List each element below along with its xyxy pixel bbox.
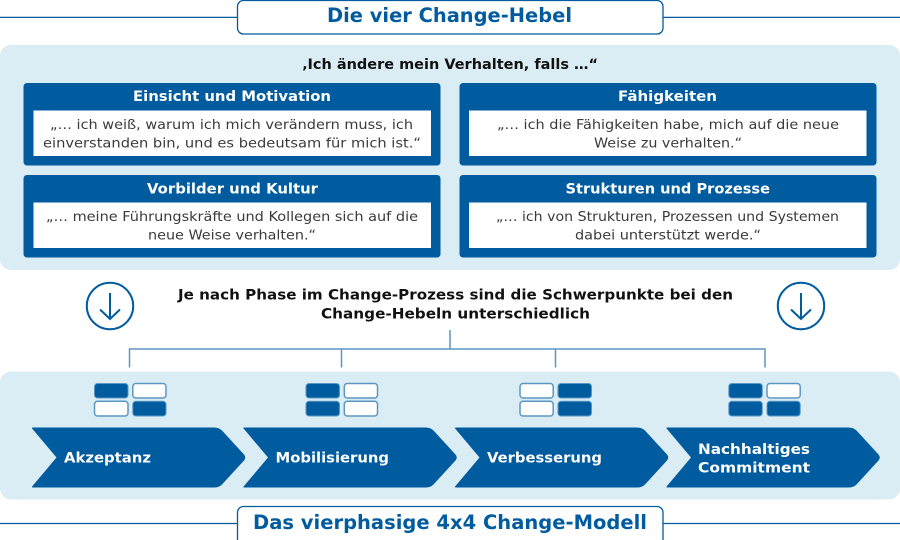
bottom title banner: Das vierphasige 4x4 Change-Modell [253, 511, 647, 534]
card: Einsicht und Motivation: einverstanden bin, und es bedeutsam für mich ist.“ [43, 136, 421, 152]
icon: matrix Mobilisierung [306, 384, 378, 416]
middle statement: Je nach Phase im Change-Prozess sind die Schwerpunkte bei den [177, 288, 733, 304]
card: Einsicht und Motivation: Einsicht und Motivation [133, 89, 331, 105]
arrow: Akzeptanz [32, 428, 245, 488]
panel heading: ‚Ich ändere mein Verhalten, falls …“ [302, 57, 598, 73]
bottom title banner [0, 506, 900, 540]
card: Fähigkeiten [460, 83, 876, 166]
card: Fähigkeiten: „… ich die Fähigkeiten habe, mich auf die neue [497, 117, 839, 133]
panel: die vier Change-Hebel [0, 45, 900, 270]
card: Strukturen und Prozesse: dabei unterstützt werde.“ [575, 228, 761, 244]
middle statement [177, 288, 733, 322]
icon: matrix Nachhaltiges Commitment [729, 384, 800, 416]
card: Fähigkeiten: Fähigkeiten [618, 89, 717, 105]
card: Vorbilder und Kultur: „… meine Führungskräfte und Kollegen sich auf die [46, 209, 418, 225]
middle statement: Change-Hebeln unterschiedlich [321, 306, 590, 322]
panel: vierphasiges Modell [0, 372, 900, 500]
icon: left down arrow [87, 283, 133, 329]
icon: matrix Akzeptanz [94, 384, 166, 416]
connector bracket [130, 330, 765, 368]
card: Fähigkeiten: Weise zu verhalten.“ [594, 136, 742, 152]
arrow: Nachhaltiges Commitment: Nachhaltiges [698, 442, 810, 458]
card: Vorbilder und Kultur [24, 175, 440, 258]
arrow: Nachhaltiges Commitment [666, 428, 880, 488]
card: Strukturen und Prozesse: Strukturen und Prozesse [566, 182, 770, 198]
arrow: Mobilisierung [243, 428, 457, 488]
top title banner [0, 0, 900, 34]
card: Strukturen und Prozesse: „… ich von Strukturen, Prozessen und Systemen [496, 209, 839, 225]
arrow: Verbesserung: Verbesserung [487, 450, 602, 466]
card: Einsicht und Motivation [24, 83, 440, 166]
card: Strukturen und Prozesse [460, 175, 876, 258]
card: Einsicht und Motivation: „… ich weiß, warum ich mich verändern muss, ich [50, 117, 413, 133]
arrow: Akzeptanz: Akzeptanz [64, 450, 151, 466]
arrow: Nachhaltiges Commitment: Commitment [698, 460, 810, 476]
arrow: Verbesserung [455, 428, 668, 488]
icon: right down arrow [778, 283, 824, 329]
card: Vorbilder und Kultur: neue Weise verhalten.“ [148, 228, 316, 244]
top title banner: Die vier Change-Hebel [327, 4, 572, 27]
card: Vorbilder und Kultur: Vorbilder und Kultur [147, 182, 318, 198]
arrow: Mobilisierung: Mobilisierung [276, 450, 389, 466]
icon: matrix Verbesserung [520, 384, 592, 416]
